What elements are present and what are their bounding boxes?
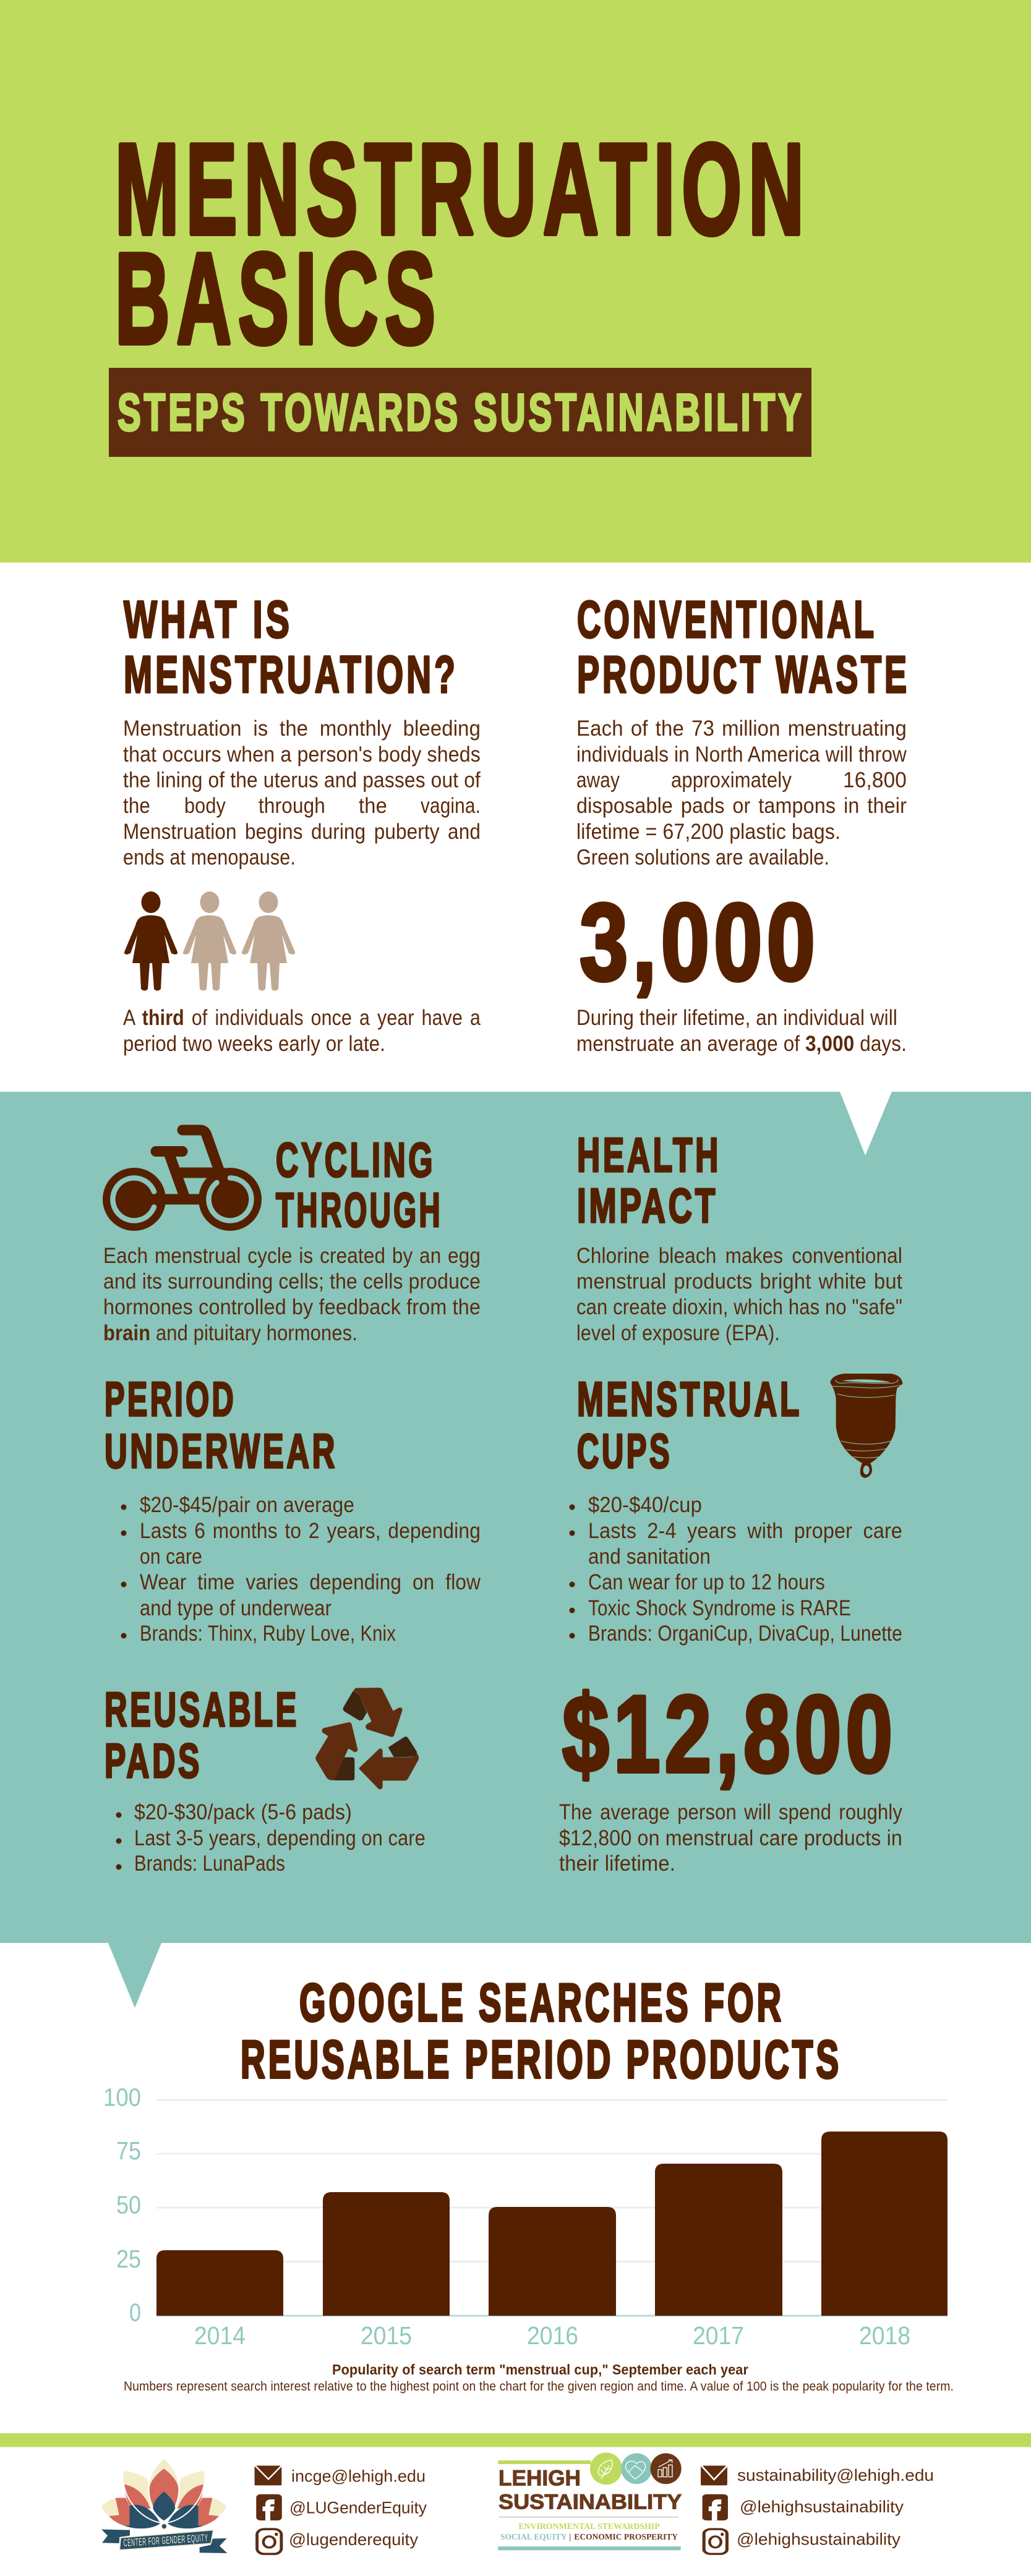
- panel: conventional product waste: [576, 590, 910, 1056]
- text block: waste facts: individuals in North America will throw: [576, 742, 907, 767]
- y axis labels: 0: [129, 2298, 141, 2327]
- text block: chlorine bleach: Chlorine bleach makes conventional: [576, 1244, 902, 1268]
- y axis labels: 75: [116, 2136, 141, 2165]
- logo: center for gender equity: [101, 2458, 227, 2553]
- icon: recycling arrows: [315, 1688, 419, 1790]
- text block: cycle: [103, 1244, 481, 1345]
- bar: 2017: [655, 2164, 782, 2316]
- y axis labels: [103, 2083, 141, 2327]
- text block: waste facts: 16,800: [843, 768, 907, 793]
- heading: google searches: [241, 1973, 842, 2089]
- list: period underwear facts: on care: [140, 1544, 202, 1569]
- text block: a third of individuals: A third of individuals once a year have a: [123, 1006, 481, 1030]
- contact: lehigh sustainability: @lehighsustainability: [740, 2497, 904, 2516]
- text block: definition: that occurs when a person's body sheds: [123, 742, 481, 767]
- heading: reusable pads: REUSABLE: [105, 1682, 299, 1736]
- list: menstrual cup facts: $20-$40/cup: [588, 1493, 702, 1517]
- text block: definition: Menstruation is the monthly bleeding: [123, 716, 481, 741]
- contact: lehigh sustainability: sustainability@lehigh.edu: [737, 2466, 934, 2485]
- heading: cycling through: [276, 1133, 443, 1237]
- icon: email: [255, 2466, 281, 2485]
- list: reusable pad facts: Brands: LunaPads: [134, 1851, 285, 1876]
- text block: waste facts: [576, 716, 907, 869]
- list: period underwear facts: Wear time varies depending on flow: [140, 1570, 481, 1594]
- logo: lehigh sustainability: [498, 2452, 682, 2550]
- text block: definition: the lining of the uterus and passes out of: [123, 768, 481, 793]
- subtitle banner: [109, 368, 811, 457]
- x axis labels: 2014: [194, 2321, 246, 2350]
- heading: health impact: HEALTH: [577, 1128, 721, 1182]
- heading: what is menstruation: WHAT IS: [124, 590, 293, 648]
- text block: cycle: brain and pituitary hormones.: [103, 1321, 357, 1345]
- text block: definition: [123, 716, 481, 869]
- chart caption: Popularity of search term "menstrual cup," September each year: [332, 2361, 748, 2378]
- big number: $12,800: $12,800: [562, 1673, 897, 1795]
- list: menstrual cup facts: [569, 1493, 902, 1646]
- title: BASICS: [115, 227, 442, 371]
- text block: waste facts: disposable pads or tampons in their: [576, 794, 907, 818]
- text block: definition: body: [184, 794, 226, 818]
- icon: instagram: [704, 2529, 727, 2554]
- text block: definition: ends at menopause.: [123, 846, 296, 869]
- logo: lehigh sustainability: SUSTAINABILITY: [498, 2490, 682, 2514]
- heading: cycling through: THROUGH: [276, 1183, 443, 1237]
- text block: chlorine bleach: level of exposure (EPA).: [576, 1321, 780, 1345]
- logo: lehigh sustainability: |: [569, 2532, 571, 2541]
- list: menstrual cup facts: Can wear for up to 12 hours: [588, 1570, 825, 1594]
- chart caption: Numbers represent search interest relative to the highest point on the chart for the given region and time. A value of 100 is the peak popularity for the term.: [124, 2379, 954, 2394]
- chart caption: [124, 2361, 954, 2394]
- panel: period underwear: [105, 1372, 481, 1646]
- x axis labels: [194, 2321, 910, 2350]
- icon: facebook: [256, 2494, 282, 2520]
- text block: waste facts: lifetime = 67,200 plastic bags.: [576, 820, 841, 844]
- heading: health impact: [577, 1128, 721, 1233]
- text block: a third of individuals: [123, 1006, 481, 1056]
- text block: 3,000 days: During their lifetime, an individual will: [576, 1006, 897, 1030]
- heading: menstrual cups: MENSTRUAL: [577, 1372, 802, 1426]
- list: reusable pad facts: Last 3-5 years, depending on care: [134, 1826, 426, 1850]
- big number: 3,000: 3,000: [580, 881, 819, 1003]
- list: menstrual cup facts: and sanitation: [588, 1544, 711, 1569]
- panel: google searches chart: [103, 1973, 954, 2394]
- x axis labels: 2018: [859, 2321, 910, 2350]
- text block: 3,000 days: menstruate an average of 3,000 days.: [576, 1032, 907, 1056]
- list: reusable pad facts: $20-$30/pack (5-6 pads): [134, 1800, 352, 1824]
- heading: reusable pads: [105, 1682, 299, 1788]
- text block: definition: through: [259, 794, 325, 818]
- heading: menstrual cups: [577, 1372, 802, 1478]
- text block: cycle: Each menstrual cycle is created by an egg: [103, 1244, 481, 1268]
- heading: what is menstruation: MENSTRUATION?: [124, 645, 458, 704]
- heading: period underwear: [105, 1372, 338, 1478]
- text block: definition: the: [123, 794, 150, 818]
- x axis labels: 2015: [361, 2321, 412, 2350]
- text block: waste facts: approximately: [671, 768, 792, 793]
- icon: three people, one highlighted: [124, 891, 295, 990]
- text block: cycle: and its surrounding cells; the cells produce: [103, 1270, 481, 1293]
- heading: period underwear: PERIOD: [105, 1372, 236, 1426]
- x axis labels: 2017: [693, 2321, 744, 2350]
- list: menstrual cup facts: Brands: OrganiCup, DivaCup, Lunette: [588, 1622, 902, 1646]
- panel: menstrual cups: [569, 1372, 902, 1646]
- bar: 2016: [489, 2207, 616, 2316]
- y axis labels: 25: [116, 2245, 141, 2273]
- list: period underwear facts: and type of underwear: [140, 1596, 332, 1620]
- text block: definition: Menstruation begins during puberty and: [123, 820, 481, 844]
- panel: footer: [0, 2433, 1031, 2554]
- text block: lifetime spending: $12,800 on menstrual care products in: [559, 1826, 902, 1850]
- text block: definition: the: [359, 794, 387, 818]
- heading: health impact: IMPACT: [577, 1178, 718, 1233]
- heading: reusable pads: PADS: [105, 1733, 202, 1788]
- y axis labels: 100: [103, 2083, 141, 2112]
- contact: gender equity: incge@lehigh.edu: [291, 2467, 426, 2485]
- panel: health impact: [576, 1128, 902, 1345]
- bar: 2015: [323, 2192, 450, 2316]
- logo: lehigh sustainability: LEHIGH: [498, 2467, 581, 2491]
- y axis labels: 50: [116, 2191, 141, 2219]
- x axis labels: 2016: [527, 2321, 578, 2350]
- icon: bicycle: [103, 1130, 262, 1231]
- contact: lehigh sustainability: @lehighsustainability: [737, 2530, 901, 2548]
- heading: period underwear: UNDERWEAR: [105, 1424, 338, 1478]
- contact: gender equity: @lugenderequity: [289, 2530, 419, 2549]
- icon: menstrual cup: [830, 1374, 902, 1478]
- icon: facebook: [703, 2494, 728, 2520]
- text block: waste facts: away: [576, 768, 620, 793]
- list: period underwear facts: Brands: Thinx, Ruby Love, Knix: [140, 1622, 396, 1646]
- text block: lifetime spending: their lifetime.: [559, 1851, 675, 1876]
- icon: instagram: [257, 2529, 281, 2554]
- heading: cycling through: CYCLING: [276, 1133, 435, 1187]
- panel: lifetime cost: [559, 1673, 902, 1876]
- contact: lehigh sustainability: [701, 2466, 934, 2554]
- text block: 3,000 days: [576, 1006, 907, 1056]
- contact: gender equity: [255, 2466, 427, 2554]
- logo: lehigh sustainability: ENVIRONMENTAL STEWARDSHIP: [518, 2522, 660, 2531]
- text block: lifetime spending: [559, 1800, 902, 1876]
- text block: chlorine bleach: [576, 1244, 902, 1345]
- heading: conventional product waste: [577, 590, 910, 704]
- logo: center for gender equity: CENTER FOR GENDER EQUITY: [123, 2532, 208, 2549]
- list: menstrual cup facts: Toxic Shock Syndrome is RARE: [588, 1596, 851, 1620]
- list: period underwear facts: Lasts 6 months to 2 years, depending: [140, 1519, 481, 1543]
- logo: lehigh sustainability: ECONOMIC PROSPERITY: [574, 2532, 678, 2541]
- panel: cycling through: [103, 1130, 481, 1345]
- text block: lifetime spending: The average person will spend roughly: [559, 1800, 902, 1824]
- list: reusable pad facts: [116, 1800, 426, 1876]
- panel: what is menstruation: [123, 590, 481, 1056]
- text block: waste facts: Each of the 73 million menstruating: [576, 716, 907, 741]
- text block: waste facts: Green solutions are available.: [576, 846, 829, 869]
- bar chart: [103, 2083, 948, 2350]
- text block: a third of individuals: period two weeks early or late.: [123, 1032, 385, 1056]
- text block: definition: vagina.: [421, 794, 481, 818]
- text block: chlorine bleach: menstrual products bright white but: [576, 1270, 902, 1293]
- list: period underwear facts: $20-$45/pair on average: [140, 1493, 354, 1517]
- icon: email: [701, 2466, 727, 2485]
- list: period underwear facts: [121, 1493, 481, 1646]
- contact: gender equity: @LUGenderEquity: [289, 2499, 427, 2517]
- logo: lehigh sustainability: SOCIAL EQUITY: [500, 2532, 567, 2541]
- list: menstrual cup facts: Lasts 2-4 years with proper care: [588, 1519, 902, 1543]
- heading: menstrual cups: CUPS: [577, 1424, 672, 1478]
- title: [115, 117, 811, 371]
- panel: reusable pads: [105, 1682, 426, 1876]
- panel: teal background with speech notches: [0, 1092, 1031, 2008]
- panel: title header: [0, 0, 1031, 563]
- heading: what is menstruation: [124, 590, 458, 704]
- bar: 2014: [156, 2250, 283, 2316]
- text block: cycle: hormones controlled by feedback from the: [103, 1295, 481, 1319]
- bar: 2018: [821, 2132, 948, 2316]
- text block: chlorine bleach: can create dioxin, which has no "safe": [576, 1295, 902, 1319]
